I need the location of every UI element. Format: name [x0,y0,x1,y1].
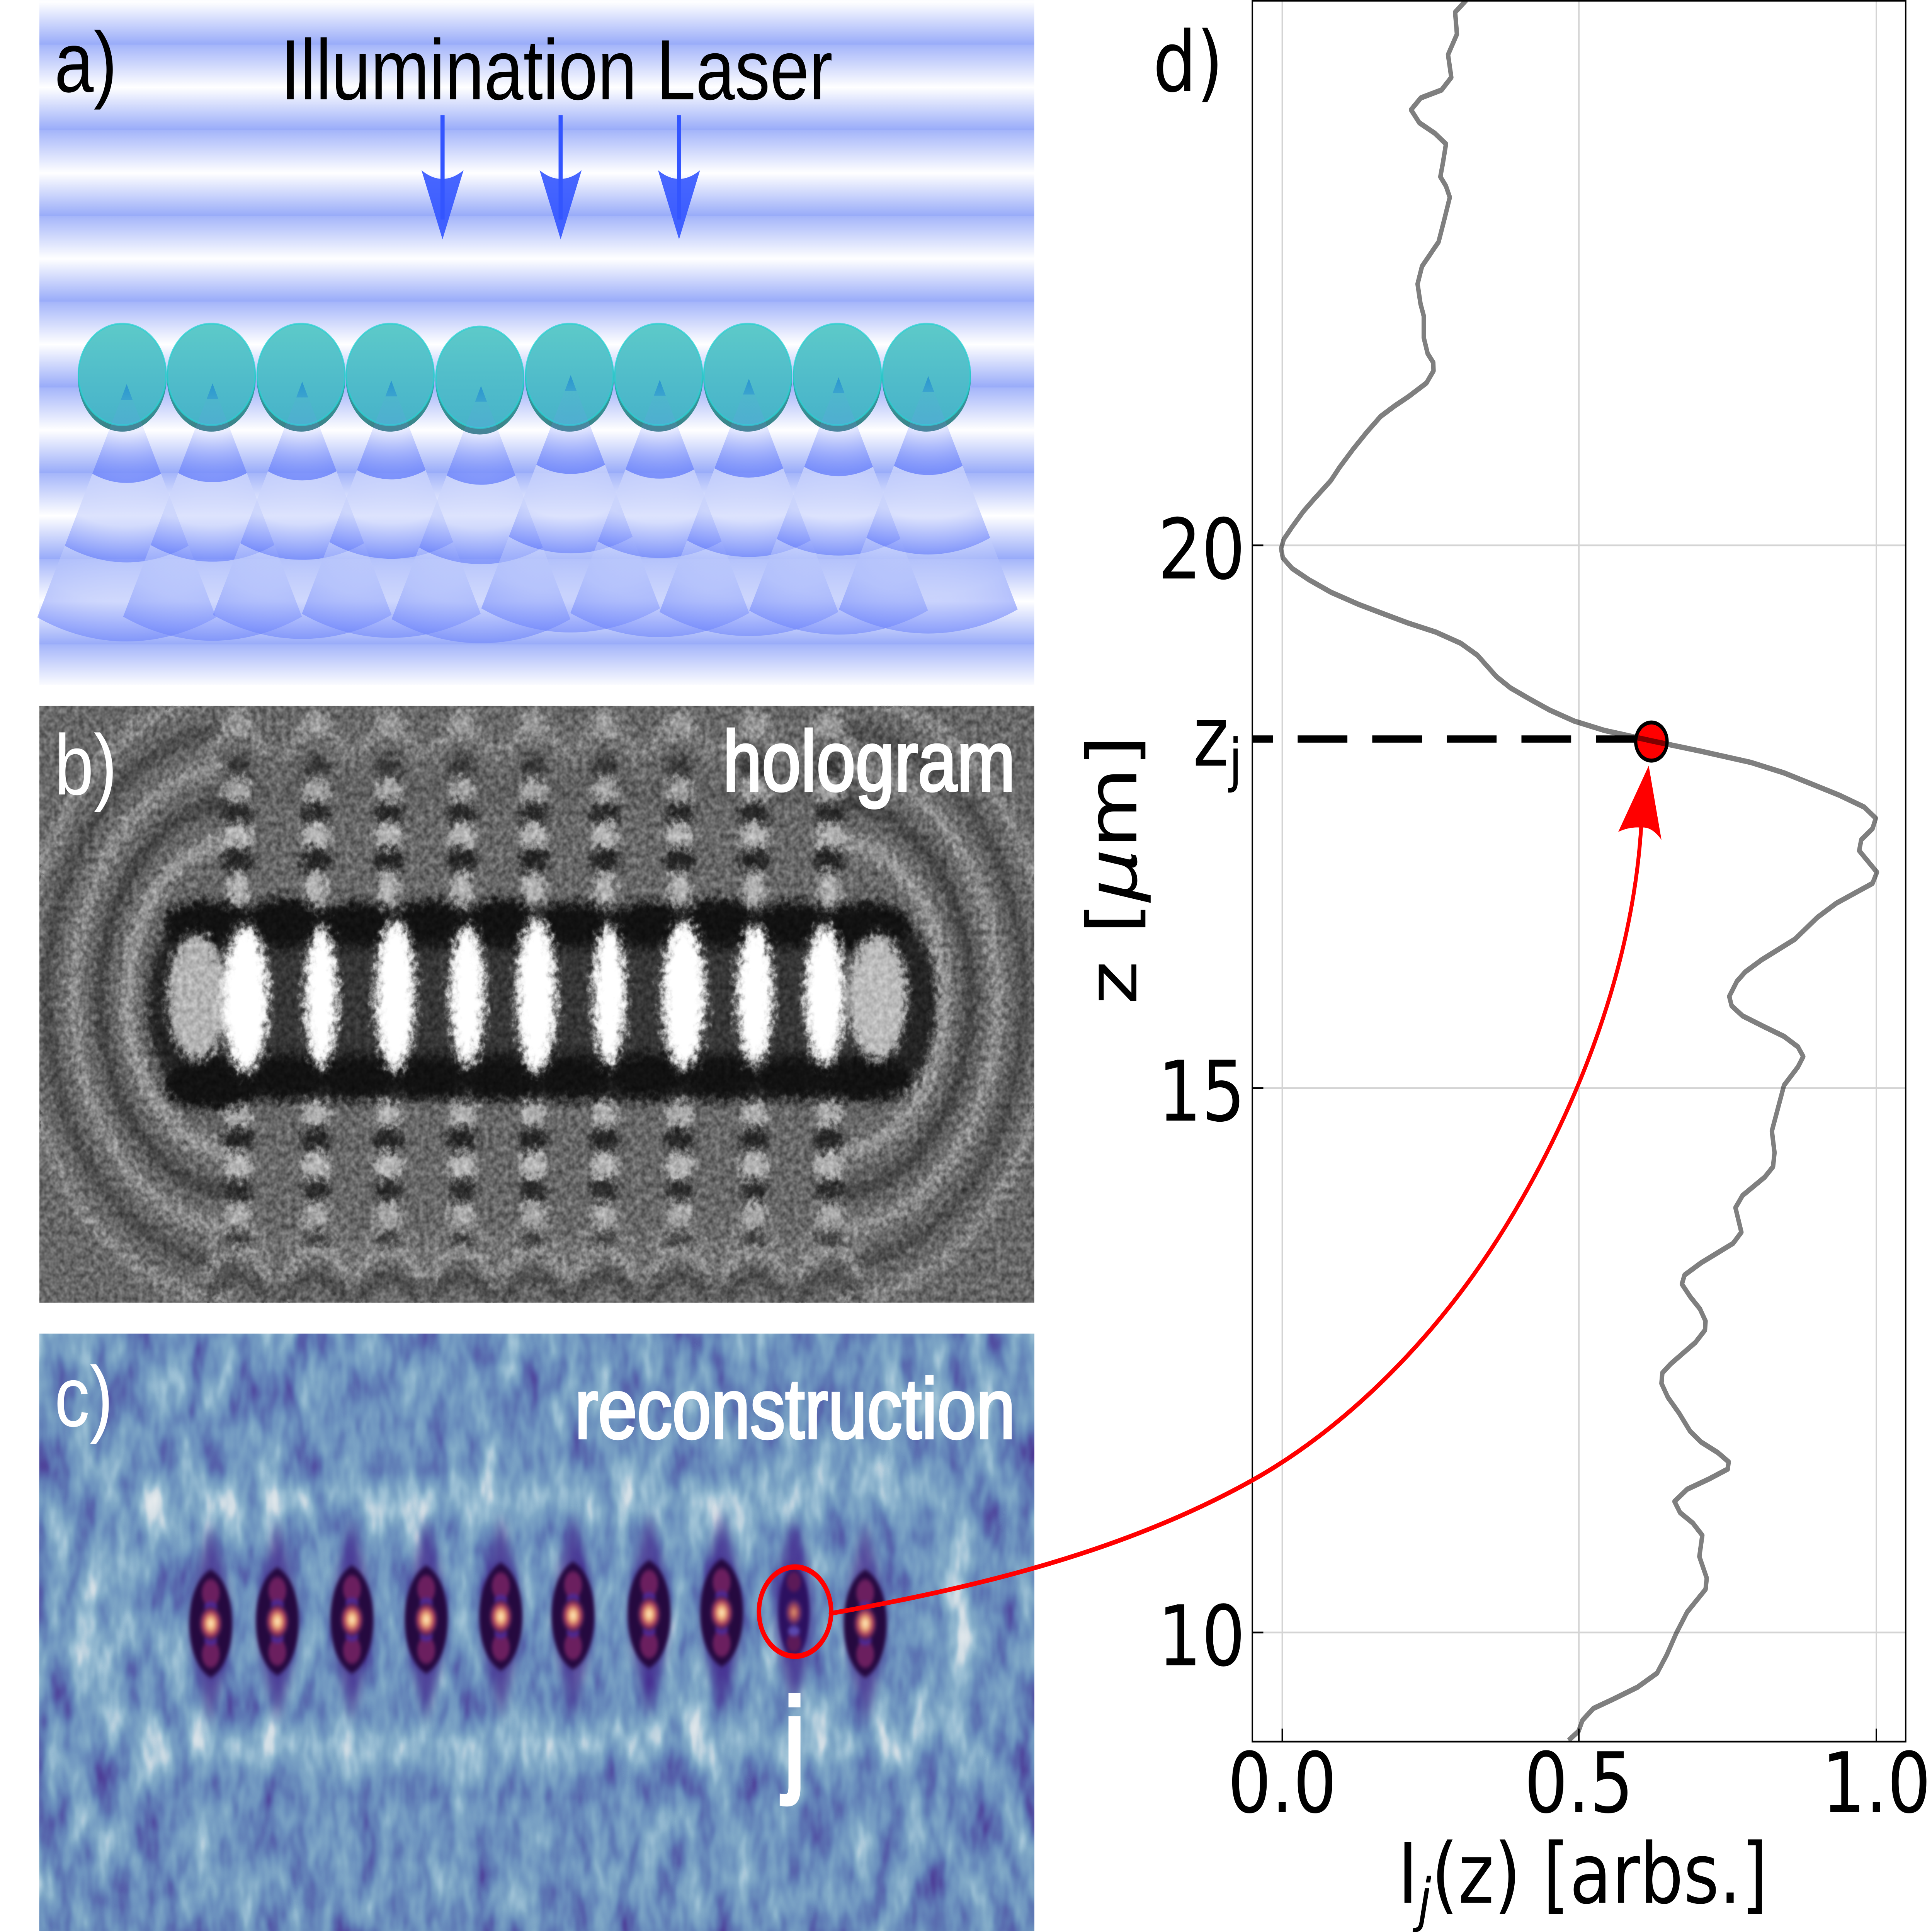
hologram fringes and bright spots [21,695,1051,1301]
panel c: reconstruction [39,1334,1036,1932]
label z_j: z [1193,688,1229,786]
panel d: intensity profile [1073,0,1931,1932]
highlight circle [759,1567,831,1656]
dashed z_j line [1252,735,1643,743]
scattered wave fans [37,375,1018,643]
y tick labels: 15 [1158,1043,1245,1140]
red arrow from particle j to marker [831,766,1662,1614]
x tick labels [1228,1735,1931,1832]
x tick labels: 0.5 [1524,1735,1633,1832]
y tick labels: 20 [1158,501,1245,598]
label z_j: j [1228,726,1242,794]
heading: Illumination Laser: Illumination Laser [281,22,833,118]
y tick labels: 10 [1158,1588,1245,1685]
panel a: illumination schematic [37,0,1034,685]
icon: laser arrow 2 [540,115,582,240]
x tick labels: 0.0 [1228,1735,1337,1832]
label c): c) [54,1349,113,1445]
label d): d) [1153,14,1223,111]
label j: j [781,1674,805,1806]
label a): a) [54,15,117,111]
x axis label: (z) [arbs.] [1431,1825,1768,1923]
grid lines [1252,1,1906,1742]
reconstructed particle spots [189,1510,886,1726]
axes frame and ticks [1252,1,1906,1742]
label b): b) [54,717,117,813]
hologram base [39,706,1034,1303]
icon: laser arrow 1 [422,115,464,240]
y axis label: z [μm] [1073,735,1153,1005]
standing-wave background [39,0,1034,685]
panel b: hologram [21,695,1051,1303]
y tick labels [1158,501,1245,1685]
x tick labels: 1.0 [1822,1735,1931,1832]
speckled background with rectangular halo [39,1334,1036,1932]
hologram grain [39,706,1034,1303]
red marker at z_j [1636,723,1667,761]
icon: laser arrow 3 [658,115,700,240]
row of spheres [78,324,971,434]
label hologram: hologram [723,713,1015,809]
label reconstruction: reconstruction [575,1361,1015,1456]
x axis label: I [1398,1825,1418,1923]
intensity curve [1281,0,1877,1740]
